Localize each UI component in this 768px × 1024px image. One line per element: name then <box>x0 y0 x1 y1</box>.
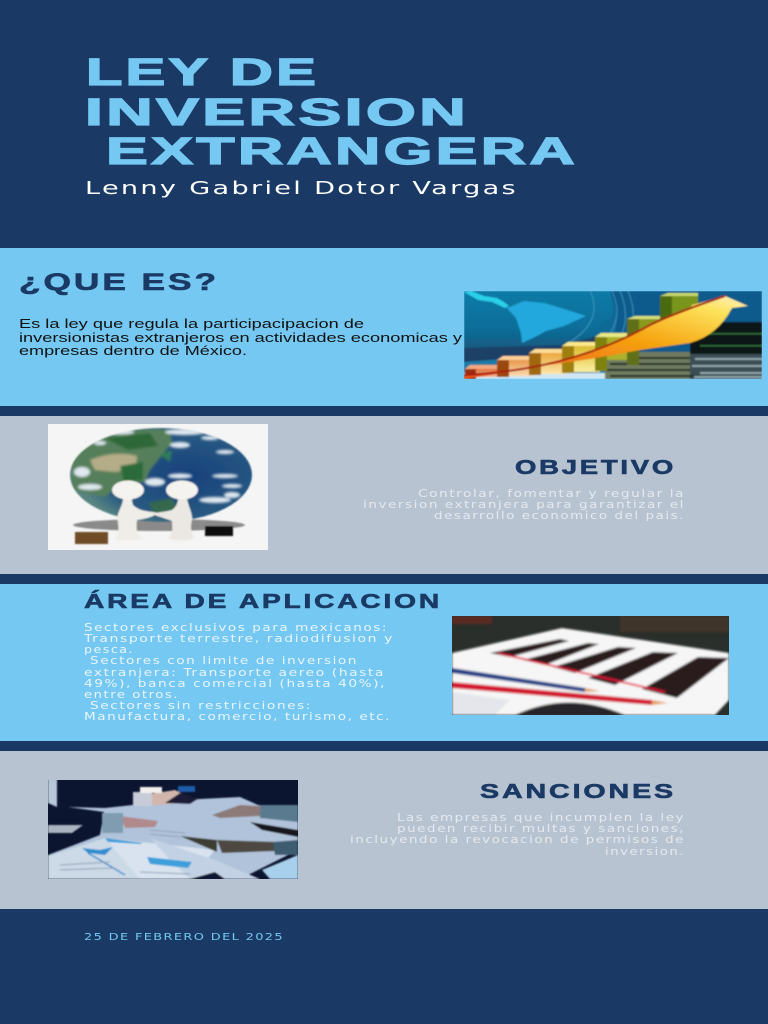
heading: que es: ¿QUE ES? <box>19 269 219 296</box>
figure right <box>152 498 195 540</box>
text: sanciones <box>350 812 685 858</box>
text: sectores <box>83 622 394 723</box>
image: growth chart over map <box>464 291 762 379</box>
text: sectores: Sectores exclusivos para mexicanos: <box>84 622 388 634</box>
text: sectores: Transporte terrestre, radiodifusion y <box>83 633 394 645</box>
text: definition: Es la ley que regula la participacipacion de <box>19 316 364 331</box>
panel: objetivo <box>0 416 768 574</box>
title block: INVERSION <box>85 92 469 134</box>
text: sectores: entre otros. <box>84 689 179 701</box>
panel: area de aplicacion <box>0 584 768 741</box>
text: sanciones: inversion. <box>605 846 685 858</box>
text: sectores: pesca. <box>84 644 134 656</box>
text: objetivo: Controlar, fomentar y regular la <box>418 488 685 500</box>
image: business meeting documents <box>48 779 298 879</box>
text: objetivo: inversion extranjera para garantizar el <box>363 499 685 511</box>
briefcases <box>75 532 108 544</box>
heading: objetivo: OBJETIVO <box>515 457 676 479</box>
text: sectores: Manufactura, comercio, turismo, etc. <box>84 711 391 723</box>
title block: LEY DE <box>86 52 319 94</box>
text: sectores: Sectores con limite de inversion <box>90 655 358 667</box>
text: sectores: Sectores sin restricciones: <box>90 700 312 712</box>
title block <box>85 52 578 173</box>
panel: sanciones <box>0 751 768 909</box>
text: sanciones: incluyendo la revocacion de permisos de <box>350 834 685 846</box>
heading: sanciones: SANCIONES <box>480 781 676 803</box>
panel: que es <box>0 248 768 406</box>
figure left <box>115 498 158 540</box>
image: bar chart photo with pencils <box>452 616 729 715</box>
text: sanciones: pueden recibir multas y sanciones, <box>397 823 685 835</box>
text: objetivo <box>363 488 685 522</box>
text: definition: empresas dentro de México. <box>19 343 247 358</box>
heading: area de aplicacion: ÁREA DE APLICACION <box>84 590 442 613</box>
text: sectores: extranjera: Transporte aereo (hasta <box>84 667 385 679</box>
image: globe with handshake <box>48 424 268 550</box>
text: objetivo: desarrollo economico del pais. <box>434 510 685 522</box>
text: definition <box>19 316 463 358</box>
bars <box>465 369 476 379</box>
text: definition: inversionistas extranjeros en actividades economicas y <box>19 330 463 345</box>
footer date: 25 DE FEBRERO DEL 2025 <box>84 932 284 943</box>
arrow <box>464 296 748 379</box>
text: sectores: 49%), banca comercial (hasta 40%), <box>84 678 386 690</box>
title block: EXTRANGERA <box>106 131 578 173</box>
author name: Lenny Gabriel Dotor Vargas <box>85 179 518 199</box>
text: sanciones: Las empresas que incumplen la ley <box>397 812 685 824</box>
